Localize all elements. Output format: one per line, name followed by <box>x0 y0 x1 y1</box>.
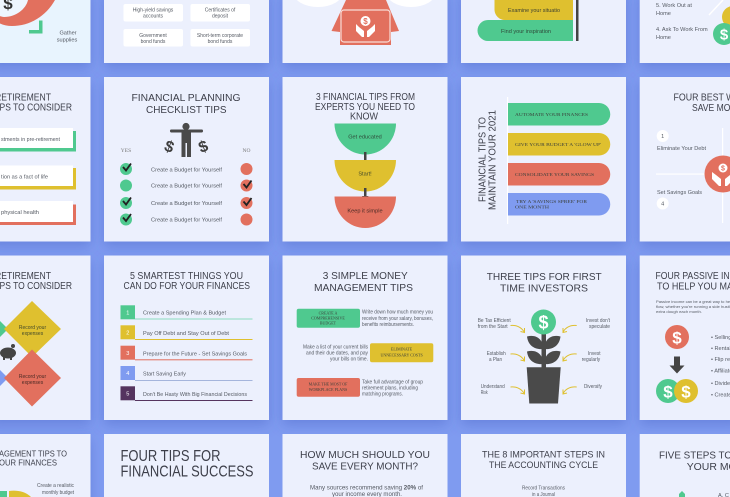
icon: businessman with dollar signs <box>162 123 211 157</box>
item: physical health: physical health <box>1 210 39 216</box>
text: tip four: Home <box>656 35 671 41</box>
button: eliminate unnecessary costs <box>370 343 433 362</box>
heading <box>659 450 730 473</box>
heading: AGEMENT TIPS TO <box>0 448 67 458</box>
step: start <box>334 160 396 192</box>
arrows <box>510 325 577 394</box>
row 4: Start Saving Early <box>143 372 186 378</box>
text: tip four <box>656 27 708 41</box>
panel: steps stack <box>461 0 626 63</box>
heading: 5 SMARTEST THINGS YOU <box>130 271 243 282</box>
text: create a realistic monthly budget <box>37 483 75 496</box>
diamond: green <box>0 301 8 357</box>
left tips: Be Tax Efficient <box>478 318 511 324</box>
icon: businessman with dollar signs: $ <box>196 138 211 157</box>
heading: CHECKLIST TIPS <box>146 105 227 116</box>
rotated heading <box>478 110 498 210</box>
left tips <box>478 318 511 396</box>
heading: HOW MUCH SHOULD YOU <box>300 449 430 461</box>
row 2 <box>120 325 252 340</box>
heading: THE 8 IMPORTANT STEPS IN <box>482 450 605 460</box>
text: gather supplies: Gather <box>59 30 77 36</box>
heading <box>300 449 430 472</box>
option: government bond funds <box>124 29 183 46</box>
item: investments: stments in pre-retirement <box>1 137 60 143</box>
heading: TIME INVESTORS <box>500 282 588 294</box>
icon: piggy bank <box>0 344 16 360</box>
bar: automate: AUTOMATE YOUR FINANCES <box>515 112 589 117</box>
checklist text: Create a Budget for Yourself <box>151 168 222 174</box>
icon: laptop with hands holding coin <box>332 0 399 45</box>
heading <box>656 271 730 292</box>
item: inflation <box>0 166 76 190</box>
row 3 <box>120 346 252 360</box>
bar: budget glow up: GIVE YOUR BUDGET A 'GLOW UP' <box>515 142 601 147</box>
button: make the most of workplace plans <box>297 378 360 397</box>
dark vertical line <box>576 0 578 41</box>
heading: FINANCIAL PLANNING <box>132 93 241 104</box>
text: list of bills: Make a list of your current bills <box>303 344 368 350</box>
step: start: Start! <box>358 172 372 178</box>
bar: savings spree: ONE MONTH <box>515 204 550 210</box>
text: gather supplies: supplies <box>57 38 77 44</box>
icon: plant with dollar coin <box>527 310 561 404</box>
text: list of bills: your bills on time. <box>330 356 368 362</box>
button: create a comprehensive budget: BUDGET <box>320 321 337 326</box>
heading: OUR FINANCES <box>0 457 57 467</box>
option: high-yield savings accounts <box>124 4 183 22</box>
step: find your inspiration <box>478 20 573 41</box>
text: create a realistic monthly budget: monthly budget <box>42 490 75 496</box>
bar: budget glow up <box>508 133 610 156</box>
heading: 3 FINANCIAL TIPS FROM <box>316 92 415 103</box>
text: write down income <box>362 310 433 328</box>
right tips: regularly <box>582 357 601 363</box>
label: yes: YES <box>121 148 131 154</box>
text: record transactions <box>522 486 565 497</box>
panel: work tips <box>640 0 730 63</box>
panel: savings options <box>104 0 269 63</box>
heading <box>314 270 413 294</box>
row 5: Don't Be Hasty With Big Financial Decisions <box>143 392 247 398</box>
panel: management tips pie <box>0 434 90 497</box>
step 4 <box>657 190 702 210</box>
option: government bond funds: Government <box>139 33 167 39</box>
text: list of bills: and their due dates, and pay <box>306 350 368 356</box>
diamond: coral: Record your <box>19 374 46 380</box>
bar: consolidate <box>508 163 610 186</box>
bar: automate <box>508 103 610 126</box>
heading <box>132 93 241 116</box>
right tips: Invest don't <box>586 318 611 324</box>
heading: KNOW <box>350 112 379 122</box>
left tips: from the Start <box>478 324 508 330</box>
diamond: yellow: expenses <box>22 331 44 337</box>
step: examine your situation <box>494 0 573 20</box>
icon: coral coin: $ <box>672 328 682 348</box>
panel: retirement tips diamonds <box>0 256 90 420</box>
arrow: down <box>670 356 684 374</box>
panel: 3 financial tips from experts <box>282 77 448 242</box>
item: physical health <box>0 201 76 225</box>
text: group retirement plans: Take full advantage of group <box>362 380 423 386</box>
bullet list: • Flip re <box>711 357 730 363</box>
diamond: yellow: Record your <box>19 325 46 331</box>
row 1: Create a Spending Plan & Budget <box>143 310 226 316</box>
step: examine your situation: Examine your situatio <box>508 8 560 14</box>
step 1: Eliminate Your Debt <box>657 146 706 152</box>
row 5 <box>120 386 252 401</box>
option: high-yield savings accounts: accounts <box>143 14 164 20</box>
bar: savings spree <box>508 193 610 216</box>
arrow <box>362 152 368 165</box>
text: write down income: Write down how much money you <box>362 310 433 316</box>
icon: businessman with dollar signs: $ <box>162 138 176 157</box>
text: savings recommendation: Many sources recommend saving 20% of <box>310 485 423 492</box>
panel: laptop illustration <box>282 0 448 63</box>
option: short-term corporate bond funds: Short-term corporate <box>197 33 243 39</box>
option: certificates of deposit: Certificates of <box>205 8 236 14</box>
right tips <box>582 318 611 390</box>
text: create a realistic monthly budget: Create a realistic <box>37 483 74 489</box>
white rules <box>656 128 723 223</box>
no column <box>240 163 252 226</box>
text: group retirement plans: matching programs. <box>362 392 403 398</box>
item: investments <box>0 128 76 152</box>
row 3: Prepare for the Future - Set Savings Goals <box>143 352 247 358</box>
checklist text: Create a Budget for Yourself <box>151 184 222 190</box>
diamond: yellow <box>4 301 61 357</box>
step 1: 1 <box>661 134 664 140</box>
row 5: 5 <box>126 392 129 398</box>
row 1: 1 <box>126 310 129 316</box>
diamond: coral <box>4 350 61 406</box>
panel: five steps <box>640 434 730 497</box>
text: write down income: receive from your salary, bonuses, <box>362 316 433 322</box>
heading <box>482 450 605 470</box>
heading <box>0 448 67 467</box>
heading <box>674 92 730 114</box>
option: high-yield savings accounts: High-yield savings <box>133 8 174 14</box>
diamond: coral: expenses <box>22 380 44 386</box>
right tips: Diversify <box>584 384 602 390</box>
icon: hands holding coin <box>704 156 730 192</box>
heading: 3 SIMPLE MONEY <box>323 270 408 282</box>
icon: green coin: $ <box>663 382 673 402</box>
text: group retirement plans: retirement plans, including <box>362 386 418 392</box>
text: group retirement plans <box>362 380 423 398</box>
panel: financial planning checklist <box>104 77 269 242</box>
icon: yellow coin <box>674 379 698 403</box>
arrow <box>362 188 368 201</box>
checklist text: Create a Budget for Yourself <box>151 201 222 207</box>
panel: 5 smartest things <box>104 256 269 420</box>
icon: green marker <box>679 491 685 497</box>
step: get educated <box>334 124 396 154</box>
icon: hands holding coin: $ <box>721 166 725 172</box>
right tips: speculate <box>589 324 610 330</box>
bar: savings spree: TRY A 'SAVINGS SPREE' FOR <box>516 199 588 204</box>
step 1 <box>657 130 706 152</box>
icon: white clouds <box>293 0 436 7</box>
button: make the most of workplace plans: MAKE THE MOST OF <box>309 382 348 386</box>
panel: three tips for first time investors <box>461 256 626 420</box>
panel: four tips for financial success <box>104 434 269 497</box>
icon: green coin <box>656 379 680 403</box>
bar: consolidate: CONSOLIDATE YOUR SAVINGS <box>515 172 595 177</box>
step: keep it simple <box>334 196 396 228</box>
option: certificates of deposit <box>190 4 250 22</box>
text: tip four: 4. Ask To Work From <box>656 27 708 33</box>
panel: 8 important steps <box>461 434 626 497</box>
heading <box>124 271 250 292</box>
panel: how much should you save <box>282 434 448 497</box>
rotated heading: FINANCIAL TIPS TO <box>478 117 488 202</box>
icon: laptop with hands holding coin: $ <box>363 17 368 26</box>
step: find your inspiration: Find your inspiration <box>501 29 551 35</box>
text: list of bills <box>303 344 368 362</box>
right tips: Invest <box>588 351 601 357</box>
panel: four best ways to save money <box>640 77 730 242</box>
row 2: Pay Off Debt and Stay Out of Debt <box>143 331 229 337</box>
label: no: NO <box>243 148 250 154</box>
panel: 3 simple money management tips <box>282 256 448 420</box>
row 4: 4 <box>126 371 129 377</box>
text: tip five <box>656 3 692 17</box>
text: intro <box>656 299 730 314</box>
diamond: blue <box>0 350 8 406</box>
row 3: 3 <box>126 351 129 357</box>
button: make the most of workplace plans: WORKPLACE PLANS <box>309 387 347 392</box>
option: short-term corporate bond funds <box>190 29 250 46</box>
rotated heading: MAINTAIN YOUR 2021 <box>488 110 498 210</box>
option: certificates of deposit: deposit <box>212 14 229 20</box>
row 1 <box>120 305 252 320</box>
heading: THE ACCOUNTING CYCLE <box>489 460 598 470</box>
heading: SAVE EVERY MONTH? <box>312 460 418 472</box>
step 4: Set Savings Goals <box>657 190 702 196</box>
heading <box>487 271 602 294</box>
button: eliminate unnecessary costs: UNNECESSARY COSTS <box>380 352 423 358</box>
button: eliminate unnecessary costs: ELIMINATE <box>391 346 413 352</box>
left tips: a Plan <box>489 357 502 363</box>
option: short-term corporate bond funds: bond funds <box>208 39 233 45</box>
icon: coral coin <box>665 325 689 349</box>
heading: FINANCIAL SUCCESS <box>120 464 254 480</box>
heading: THREE TIPS FOR FIRST <box>487 271 602 283</box>
checklist text <box>151 168 222 224</box>
text: record transactions: Record Transactions <box>522 486 565 492</box>
row 4 <box>120 366 252 381</box>
heading: EXPERTS YOU NEED TO <box>315 102 415 113</box>
left tips: Establish <box>487 351 506 357</box>
bullet list: • Divide <box>711 381 730 387</box>
step: get educated: Get educated <box>348 134 382 140</box>
heading <box>315 92 415 122</box>
icon: yellow coin: $ <box>681 382 691 402</box>
heading <box>120 448 254 480</box>
checklist text: Create a Budget for Yourself <box>151 218 222 224</box>
button: create a comprehensive budget: CREATE A <box>319 310 338 316</box>
yes column <box>120 163 132 226</box>
button: create a comprehensive budget: COMPREHENSIVE <box>311 316 345 321</box>
text: tip five: 5. Work Out at <box>656 3 692 9</box>
heading: CAN DO FOR YOUR FINANCES <box>124 281 250 292</box>
panel: retirement tips <box>0 77 90 242</box>
heading <box>0 271 72 292</box>
icon: coins: $ <box>720 26 729 44</box>
left tips: Risk <box>481 390 488 396</box>
icon: green corner bracket <box>29 20 42 34</box>
text: gather supplies <box>57 30 77 44</box>
step 4: 4 <box>661 202 664 208</box>
option: government bond funds: bond funds <box>141 39 166 45</box>
text: write down income: benefits reimbursements. <box>362 322 414 328</box>
item: inflation: tion as a fact of life <box>1 174 48 180</box>
heading <box>0 92 72 114</box>
white rule <box>507 97 508 224</box>
button: create a comprehensive budget <box>297 309 360 328</box>
step: keep it simple: Keep it simple <box>347 208 383 214</box>
text: savings recommendation <box>310 485 423 497</box>
text: tip five: Home <box>656 11 671 17</box>
left tips: Understand <box>481 384 505 390</box>
icon: plant with dollar coin: $ <box>538 312 549 332</box>
bullet list <box>711 335 730 398</box>
panel: gather supplies <box>0 0 90 63</box>
panel: four passive income streams <box>640 256 730 420</box>
row 2: 2 <box>126 330 129 336</box>
heading: FOUR TIPS FOR <box>120 448 220 465</box>
heading: MANAGEMENT TIPS <box>314 282 413 294</box>
chart: donut fragment <box>0 491 31 497</box>
text: intro: extra dough each month. <box>656 309 702 314</box>
panel: financial tips 2021 <box>461 77 626 242</box>
